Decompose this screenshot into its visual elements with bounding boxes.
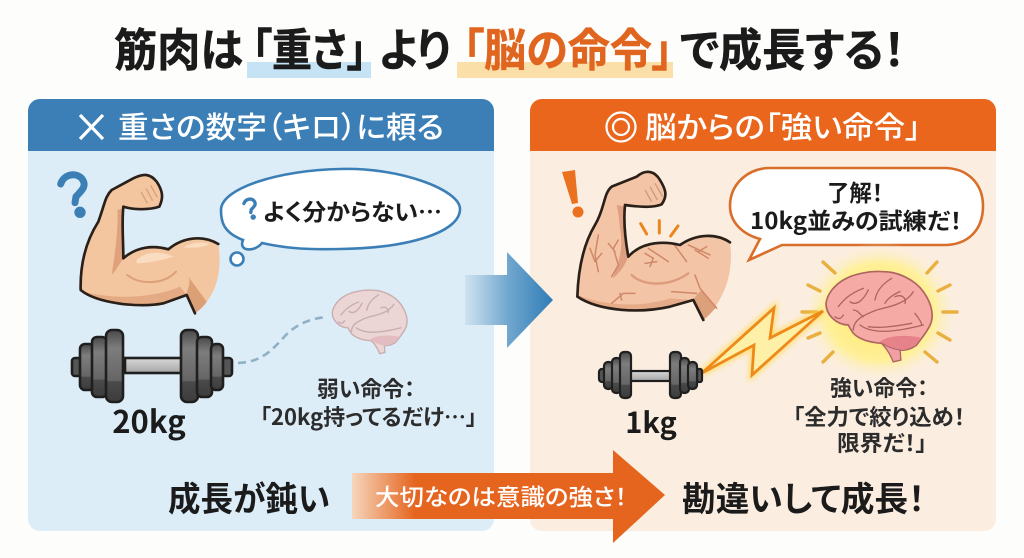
- panel: brain command: 脳からの「強い命令」: [645, 103, 921, 147]
- weak command text: [260, 372, 477, 432]
- title: 「重さ」: [252, 14, 367, 79]
- result: slow growth: 成長が鈍い: [168, 472, 330, 521]
- arrow: orange bottom: 大切なのは意識の強さ！: [375, 478, 627, 512]
- icon: strong arm: [577, 172, 731, 320]
- icon: orange exclamation: [562, 170, 584, 218]
- brain glow: [802, 242, 958, 382]
- icon: 20kg dumbbell: [72, 330, 232, 402]
- title: より: [379, 14, 451, 79]
- arrow: blue center: [465, 252, 553, 348]
- brain rays: [802, 262, 957, 362]
- panel: weight numbers: 重さの数字（キロ）に頼る: [118, 103, 444, 147]
- title: [114, 14, 905, 79]
- weak command text: 「20kg持ってるだけ…」: [260, 400, 477, 432]
- thought bubble: よく分からない…: [263, 193, 442, 227]
- strong command text: 限界だ！」: [837, 426, 927, 458]
- icon: relaxed arm: [81, 175, 220, 313]
- lightning bolt: [702, 308, 823, 375]
- strong command text: [793, 371, 965, 458]
- thought bubble: [221, 169, 460, 266]
- arrow: orange bottom: [352, 450, 665, 543]
- result: growth by illusion: 勘違いして成長！: [682, 472, 925, 521]
- icon: blue question mark: [61, 175, 86, 218]
- panel: brain command: [530, 99, 996, 531]
- title: 筋肉は: [114, 14, 243, 79]
- title: で成長する！: [680, 14, 905, 79]
- panel: weight numbers: [28, 99, 494, 531]
- speech bubble: 10kg並みの試練だ！: [750, 202, 962, 236]
- speech bubble: [730, 168, 983, 260]
- icon: 1kg dumbbell: [599, 352, 702, 398]
- strong command text: 強い命令：: [830, 371, 928, 403]
- strong command text: 「全力で絞り込め！: [793, 400, 965, 432]
- weak command text: 弱い命令：: [317, 372, 415, 404]
- title: 「脳の命令」: [463, 14, 673, 79]
- speech bubble: 了解！: [827, 174, 883, 208]
- label: 20kg: 20kg: [112, 397, 186, 442]
- label: 1kg: 1kg: [625, 400, 677, 442]
- dashed weak signal: [238, 317, 327, 363]
- icon: weak brain: [332, 290, 407, 354]
- icon: strong brain: [826, 271, 932, 362]
